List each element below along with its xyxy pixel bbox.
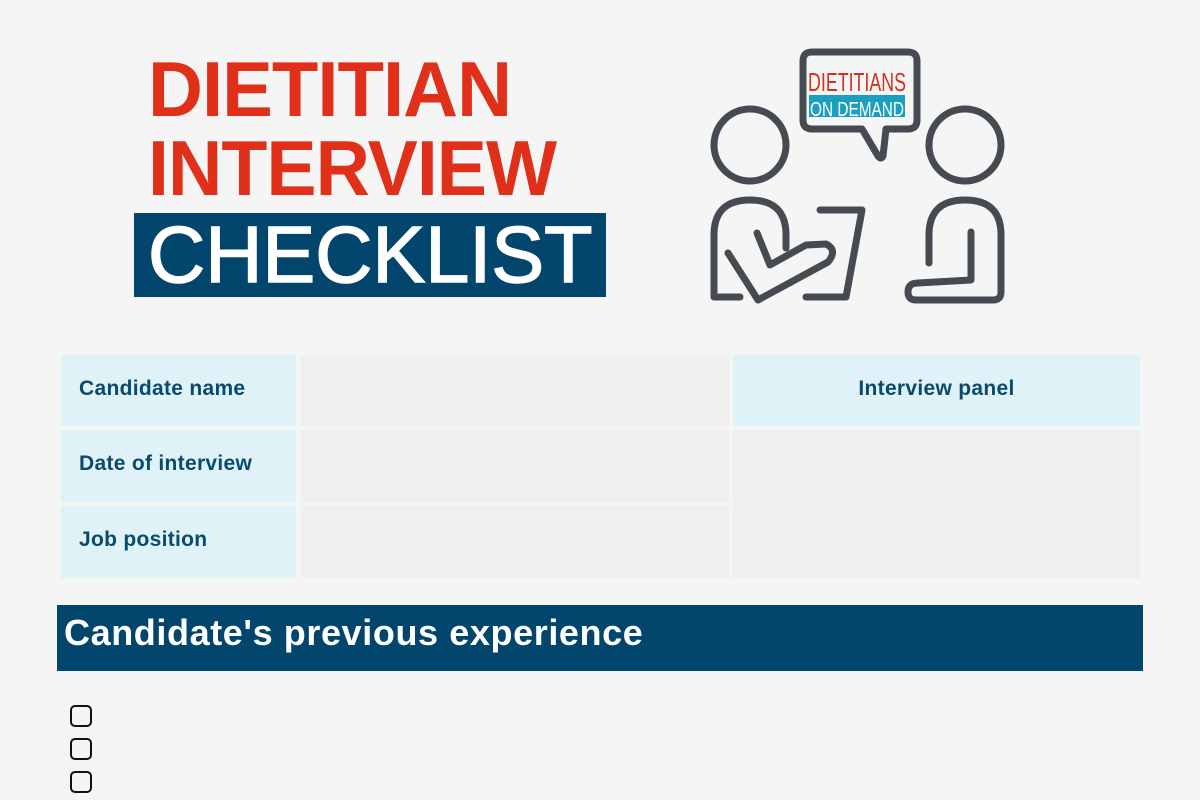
icon: interview people with speech bubble logo	[710, 48, 1004, 304]
label: date of interview	[61, 430, 296, 502]
label: job position: Job position	[79, 528, 207, 551]
section header: previous experience: Candidate's previous experience	[64, 612, 643, 653]
checkboxes	[70, 705, 92, 793]
label: job position	[61, 506, 296, 578]
title	[134, 45, 606, 297]
label: candidate name: Candidate name	[79, 376, 245, 400]
details table	[61, 355, 1140, 578]
label: interview panel	[733, 355, 1140, 426]
label: candidate name	[61, 355, 296, 426]
label: interview panel: Interview panel	[858, 376, 1015, 400]
title line: INTERVIEW: INTERVIEW	[148, 124, 556, 212]
section header: previous experience	[57, 605, 1143, 671]
logo text: DIETITIANS	[808, 67, 906, 97]
icon: interview people with speech bubble logo: ON DEMAND	[810, 99, 904, 121]
title line: DIETITIAN: DIETITIAN	[148, 45, 511, 133]
label: date of interview: Date of interview	[79, 452, 252, 475]
